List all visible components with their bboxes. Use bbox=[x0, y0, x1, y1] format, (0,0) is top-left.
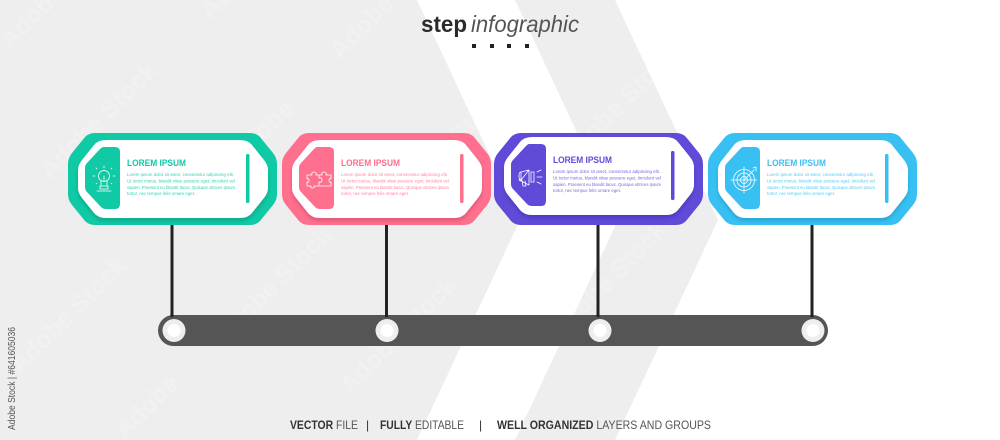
body text: tortor, nec tempus felis ornare eget. bbox=[341, 191, 409, 197]
icon: puzzle pieces bbox=[307, 172, 331, 188]
tab bbox=[85, 147, 120, 209]
body text bbox=[341, 172, 449, 197]
stock watermark pattern: Adobe Stock bbox=[334, 271, 462, 399]
panel: step 4 bbox=[708, 133, 917, 225]
body text bbox=[127, 172, 235, 197]
footer caption: VECTOR FILE bbox=[290, 418, 358, 432]
heading: LOREM IPSUM bbox=[341, 158, 400, 168]
side credit: Adobe Stock | #641605036 bbox=[7, 327, 18, 430]
stock watermark pattern: Adobe Stock bbox=[209, 221, 337, 349]
footer caption: FULLY EDITABLE bbox=[380, 418, 464, 432]
footer caption bbox=[290, 418, 711, 432]
body text: sapien. Praesent eu blandit lacus. Quisque ultrices ipsum bbox=[127, 185, 235, 191]
timeline node 2 bbox=[376, 319, 398, 342]
stock watermark pattern: Adobe Stock bbox=[729, 66, 857, 194]
heading: LOREM IPSUM bbox=[553, 155, 612, 165]
panel: step 1 bbox=[68, 133, 277, 225]
title: step bbox=[421, 11, 467, 37]
footer caption: | bbox=[479, 418, 482, 432]
body text: Lorem ipsum dolor sit amet, consectetur adipiscing elit. bbox=[127, 172, 234, 178]
body text bbox=[553, 169, 661, 194]
body text: Lorem ipsum dolor sit amet, consectetur adipiscing elit. bbox=[553, 169, 660, 175]
stock watermark pattern: Adobe Stock bbox=[4, 251, 132, 379]
footer caption: WELL ORGANIZED LAYERS AND GROUPS bbox=[497, 418, 711, 432]
heading: LOREM IPSUM bbox=[767, 158, 826, 168]
body text: sapien. Praesent eu blandit lacus. Quisque ultrices ipsum bbox=[553, 182, 661, 188]
body text bbox=[767, 172, 875, 197]
icon: megaphone bbox=[519, 170, 542, 186]
tab bbox=[299, 147, 334, 209]
accent bar bbox=[885, 154, 888, 203]
accent bar bbox=[246, 154, 250, 203]
title bbox=[421, 11, 579, 37]
tab bbox=[725, 147, 760, 209]
stock watermark pattern: Adobe Stock bbox=[829, 121, 957, 249]
body text: tortor, nec tempus felis ornare eget. bbox=[127, 191, 195, 197]
title dots bbox=[472, 44, 529, 48]
stock watermark pattern: Adobe Stock bbox=[34, 56, 162, 184]
timeline node 1 bbox=[162, 319, 186, 342]
stock watermark pattern: Adobe Stock bbox=[669, 276, 797, 404]
panel: step 2 bbox=[282, 133, 491, 225]
body text: Lorem ipsum dolor sit amet, consectetur adipiscing elit. bbox=[341, 172, 448, 178]
body text: tortor, nec tempus felis ornare eget. bbox=[553, 188, 621, 194]
body text: tortor, nec tempus felis ornare eget. bbox=[767, 191, 835, 197]
stock watermark pattern: Adobe bbox=[224, 94, 299, 169]
timeline bar bbox=[158, 315, 828, 346]
stock watermark pattern: Adobe Stock bbox=[544, 216, 672, 344]
timeline node 4 bbox=[802, 319, 824, 342]
stock watermark pattern: Adobe Stock bbox=[554, 41, 682, 169]
body text: Ut tortor metus, blandit vitae posuere eget, tincidunt vel bbox=[341, 178, 449, 184]
background chevrons bbox=[0, 0, 718, 440]
stock watermark pattern: Adobe Stock bbox=[869, 246, 997, 374]
panel: step 3 bbox=[494, 133, 703, 225]
timeline node 3 bbox=[588, 319, 612, 342]
body text: sapien. Praesent eu blandit lacus. Quisque ultrices ipsum bbox=[767, 185, 875, 191]
body text: Ut tortor metus, blandit vitae posuere eget, tincidunt vel bbox=[767, 178, 875, 184]
icon: target bbox=[731, 167, 757, 193]
body text: Ut tortor metus, blandit vitae posuere eget, tincidunt vel bbox=[553, 176, 661, 182]
body text: sapien. Praesent eu blandit lacus. Quisque ultrices ipsum bbox=[341, 185, 449, 191]
body text: Lorem ipsum dolor sit amet, consectetur adipiscing elit. bbox=[767, 172, 874, 178]
footer caption: | bbox=[366, 418, 369, 432]
tab bbox=[511, 144, 546, 206]
stock watermark pattern: Adobe Stock bbox=[384, 81, 512, 209]
heading: LOREM IPSUM bbox=[127, 158, 186, 168]
accent bar bbox=[460, 154, 464, 203]
body text: Ut tortor metus, blandit vitae posuere eget, tincidunt vel bbox=[127, 178, 235, 184]
connector lines bbox=[170, 224, 814, 317]
accent bar bbox=[671, 151, 674, 200]
title: infographic bbox=[471, 11, 579, 37]
icon: light bulb bbox=[93, 166, 115, 191]
